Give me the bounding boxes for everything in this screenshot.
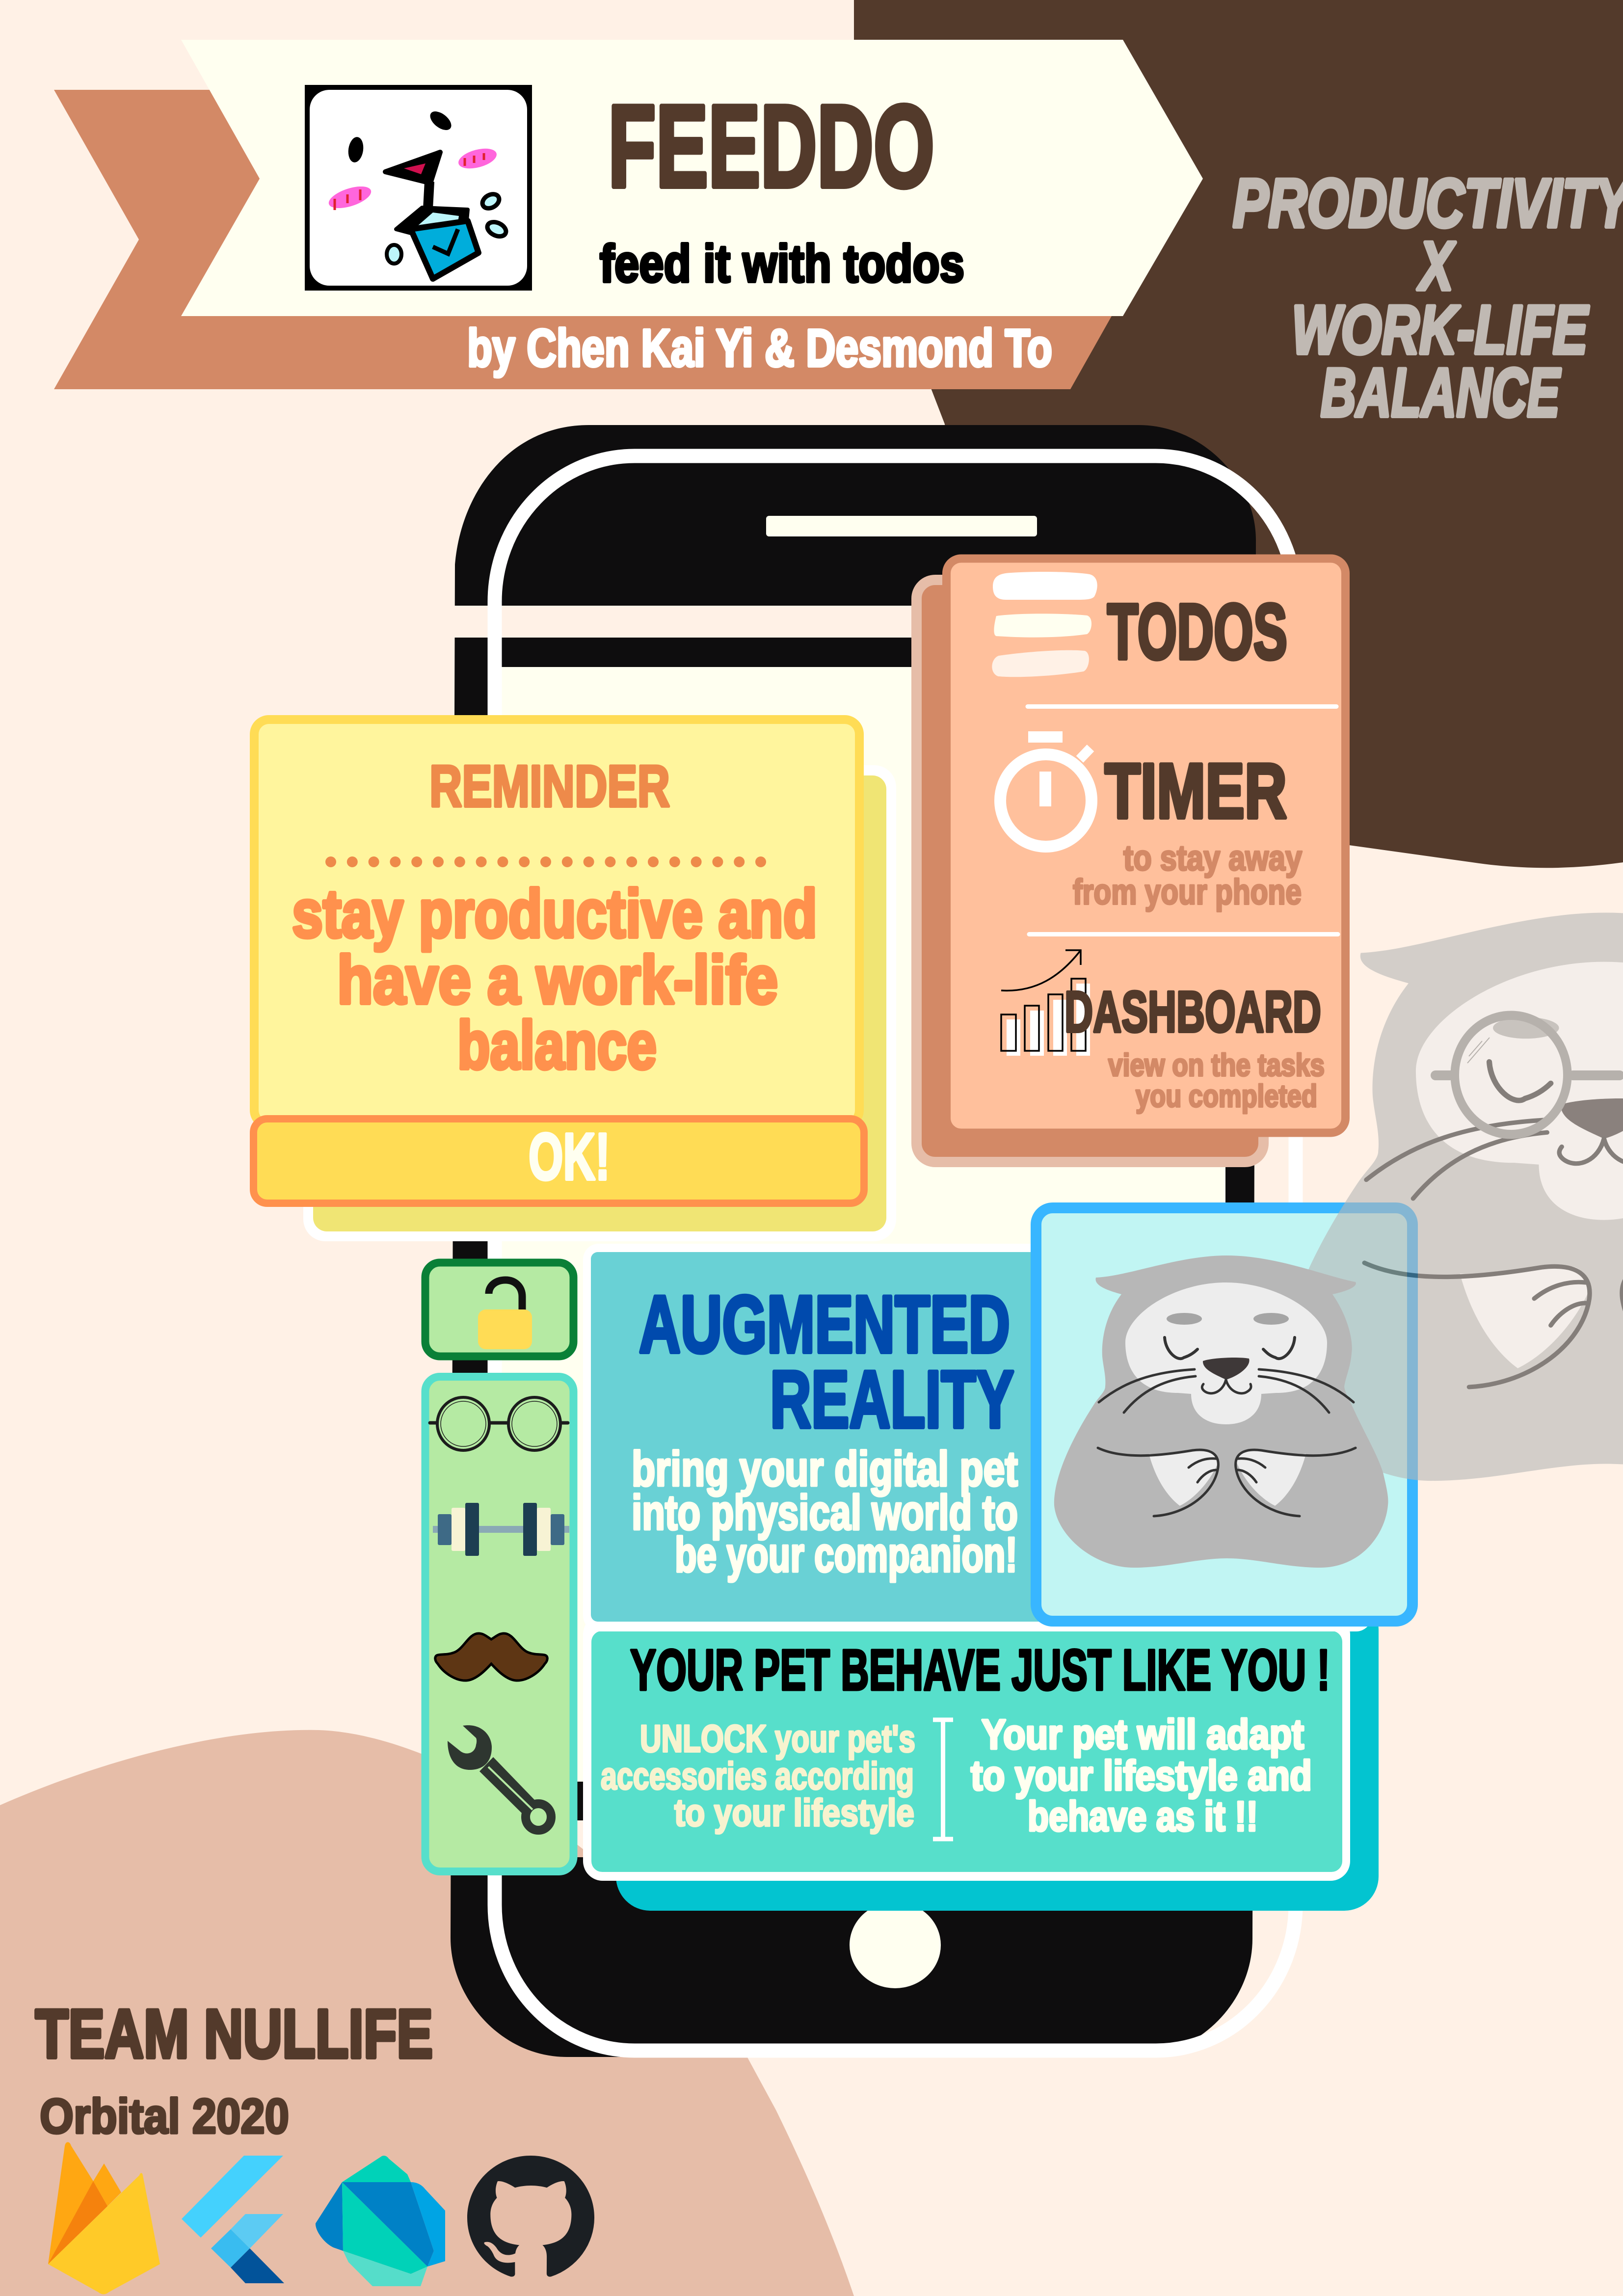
reminder panel xyxy=(254,720,859,1125)
pet card xyxy=(1036,1208,1412,1621)
augmented reality panel xyxy=(583,1244,1372,1631)
augmented reality description: bring your digital pet xyxy=(632,1442,1018,1496)
reminder message: have a work-life xyxy=(337,942,778,1018)
timer description xyxy=(1073,839,1302,912)
augmented reality heading: AUGMENTED xyxy=(639,1279,1010,1369)
phone screen xyxy=(502,667,1225,1782)
icon: wrench xyxy=(448,1725,551,1830)
icon: github xyxy=(467,2156,594,2277)
reminder backing xyxy=(303,765,896,1241)
reminder heading: REMINDER xyxy=(429,753,670,819)
divider xyxy=(933,1720,953,1839)
phone outline xyxy=(495,456,1296,2051)
timer description: to stay away xyxy=(1123,839,1302,878)
augmented reality description xyxy=(632,1442,1018,1582)
banner back ribbon xyxy=(54,90,1112,389)
reminder message xyxy=(292,876,817,1083)
front sheet xyxy=(946,559,1346,1133)
timer description: from your phone xyxy=(1073,873,1302,912)
icon: open padlock xyxy=(478,1280,532,1349)
adapt text: to your lifestyle and xyxy=(971,1753,1312,1799)
icon: bar chart with arrow xyxy=(1001,950,1090,1056)
back sheet xyxy=(917,580,1263,1162)
banner front ribbon xyxy=(181,40,1203,316)
dashboard description xyxy=(1108,1047,1325,1114)
icon: firebase xyxy=(48,2142,160,2294)
background shape: brown top right xyxy=(854,0,1623,868)
unlock text xyxy=(601,1717,915,1834)
dashboard description: view on the tasks xyxy=(1108,1047,1325,1083)
faded pet with glasses xyxy=(1282,913,1623,1481)
augmented reality heading xyxy=(639,1279,1014,1444)
unlock text: accessories according xyxy=(601,1754,914,1797)
phone home button xyxy=(850,1902,941,1988)
team name: TEAM NULLIFE xyxy=(35,1995,433,2072)
unlock text: UNLOCK your pet's xyxy=(640,1717,915,1760)
icon: moustache xyxy=(435,1633,547,1681)
phone speaker xyxy=(766,516,1037,536)
author line: by Chen Kai Yi & Desmond To xyxy=(467,318,1052,377)
ok button: OK! xyxy=(529,1120,610,1194)
timer label: TIMER xyxy=(1105,748,1287,834)
accessories panel xyxy=(425,1377,573,1871)
behaviour panel xyxy=(583,1615,1350,1881)
headline: productivity x work-life balance xyxy=(1233,164,1623,431)
icon: dart xyxy=(316,2156,445,2286)
icon: list xyxy=(992,572,1097,677)
accessory unlock panel xyxy=(425,1262,573,1357)
reminder card xyxy=(253,720,896,1241)
reminder message: stay productive and xyxy=(292,876,817,952)
title banner xyxy=(54,40,1203,389)
ok button xyxy=(253,1119,864,1203)
behaviour panel backing xyxy=(616,1595,1379,1911)
orbital year: Orbital 2020 xyxy=(40,2089,289,2144)
pet illustration xyxy=(1054,1255,1388,1568)
headline: productivity x work-life balance: X xyxy=(1417,227,1456,304)
dashboard description: you completed xyxy=(1136,1078,1317,1114)
icon: flutter xyxy=(182,2156,284,2283)
app logo xyxy=(305,85,532,291)
phone body xyxy=(451,425,1256,2057)
adapt text xyxy=(971,1711,1312,1840)
todos label: TODOS xyxy=(1107,587,1287,675)
adapt text: behave as it !! xyxy=(1028,1793,1258,1840)
background shape: tan bottom left xyxy=(0,1730,854,2296)
adapt text: Your pet will adapt xyxy=(982,1711,1304,1758)
augmented reality heading: REALITY xyxy=(770,1354,1014,1444)
unlock text: to your lifestyle xyxy=(674,1791,914,1834)
features card xyxy=(917,559,1346,1162)
dashboard label: DASHBOARD xyxy=(1064,980,1321,1044)
reminder message: balance xyxy=(457,1008,657,1083)
app name: FEEDDO xyxy=(608,81,934,212)
icon: glasses xyxy=(430,1397,568,1450)
tagline: feed it with todos xyxy=(600,234,964,293)
phone xyxy=(451,425,1296,2057)
icon: dumbbell xyxy=(433,1503,569,1556)
dotted divider xyxy=(331,856,761,867)
augmented reality description: into physical world to xyxy=(632,1485,1018,1540)
augmented reality description: be your companion! xyxy=(675,1527,1017,1582)
icon: stopwatch xyxy=(1000,731,1091,847)
